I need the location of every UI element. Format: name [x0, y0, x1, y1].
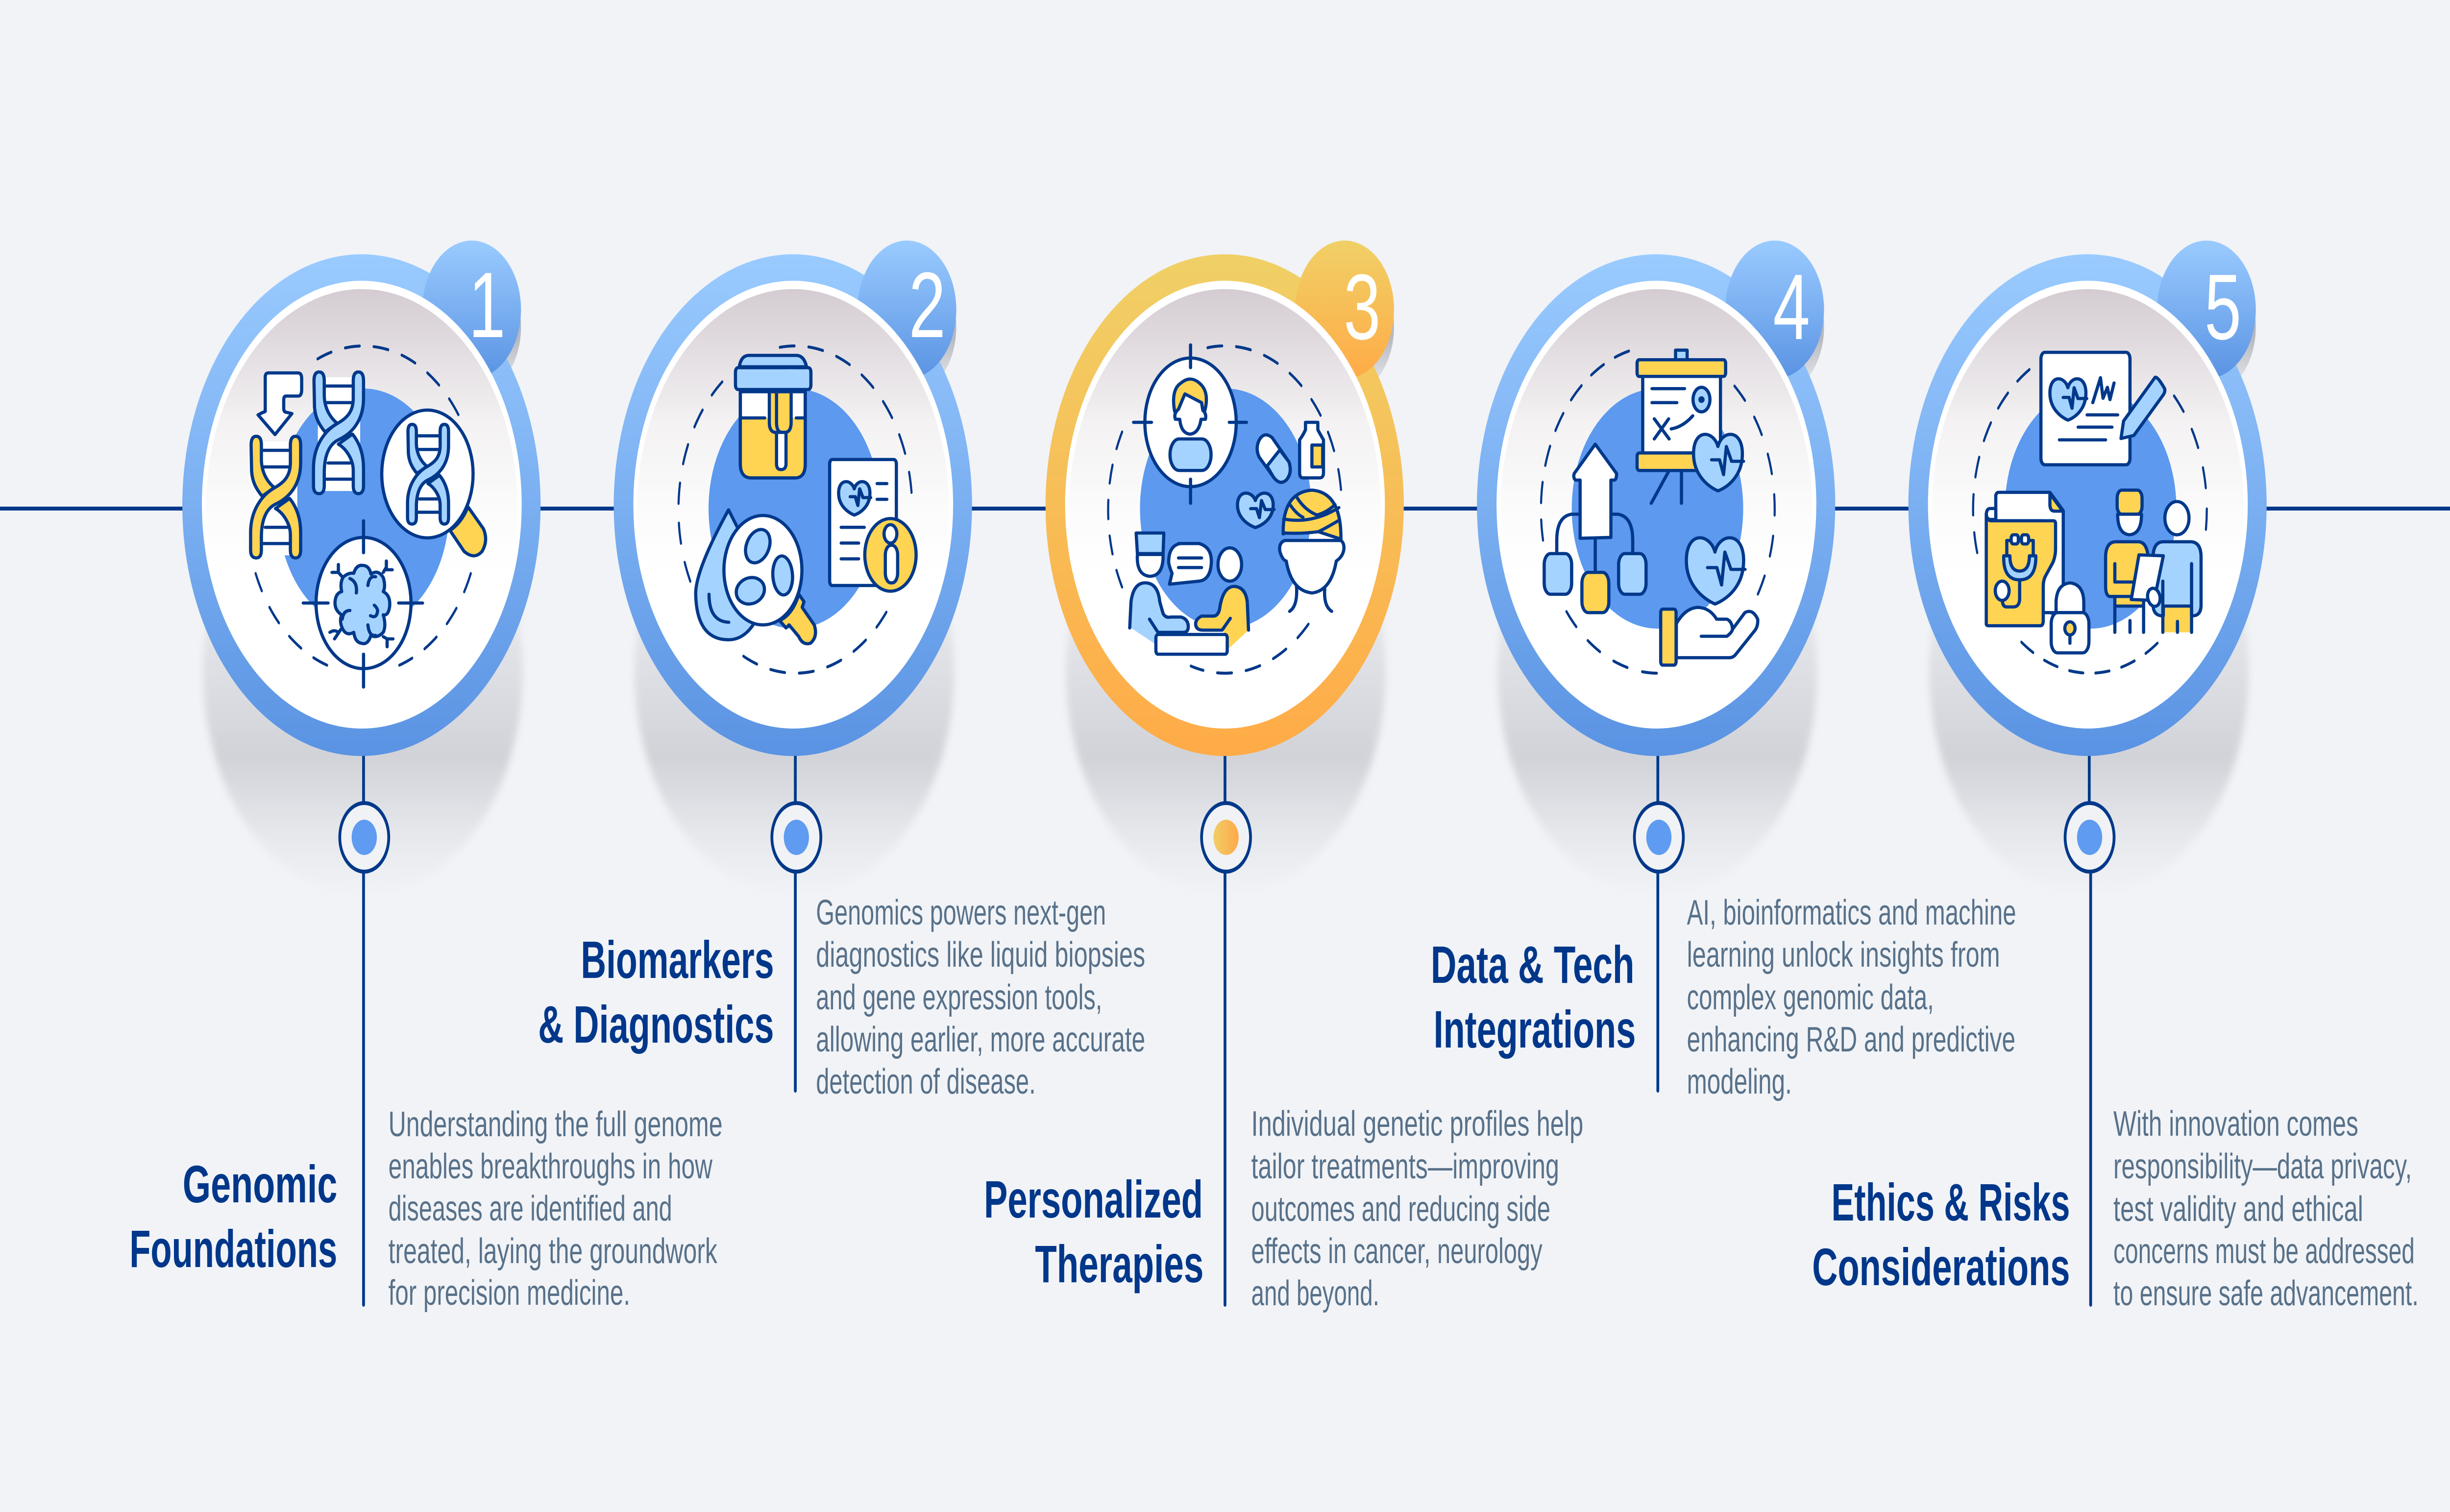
- connector stem: [1656, 755, 1660, 1091]
- drop shadow: [203, 447, 523, 895]
- description text: concerns must be addressed: [2113, 1232, 2415, 1271]
- description text: diagnostics like liquid biopsies: [816, 935, 1145, 975]
- timeline dot: [340, 803, 389, 872]
- drop shadow: [1929, 447, 2249, 895]
- outer ring: [613, 254, 972, 756]
- panel 2: biomarkers and diagnostics: [538, 241, 1145, 1101]
- icon: data board, flowchart and heart care: [1544, 350, 1758, 665]
- description text: complex genomic data,: [1687, 978, 1934, 1017]
- timeline dot: [772, 803, 821, 872]
- panel 1: genomic foundations: [129, 241, 723, 1313]
- description text: diseases are identified and: [389, 1189, 672, 1228]
- centre blue disc: [709, 389, 880, 629]
- outer ring: [1909, 254, 2267, 756]
- description text: treated, laying the groundwork: [389, 1232, 717, 1271]
- description text: tailor treatments—improving: [1251, 1147, 1559, 1186]
- heading: ethics and risks considerations: Considerations: [1812, 1237, 2070, 1296]
- heading: genomic foundations: Foundations: [129, 1219, 337, 1278]
- panel 5: ethics and risks considerations: [1812, 241, 2419, 1313]
- number badge: [1725, 241, 1824, 379]
- inner disc: [633, 281, 953, 729]
- heading: ethics and risks considerations: [1812, 1172, 2070, 1296]
- badge shadow: [422, 258, 521, 396]
- centre blue disc: [1140, 389, 1311, 629]
- description text: [1251, 1104, 1583, 1313]
- description text: With innovation comes: [2113, 1104, 2358, 1144]
- heading: data and tech integrations: [1431, 935, 1636, 1059]
- number badge: 4: [1773, 255, 1810, 359]
- dashed orbit: [679, 346, 912, 673]
- dashed orbit: [1108, 346, 1341, 673]
- outer ring: [1046, 254, 1404, 756]
- description text: outcomes and reducing side: [1251, 1190, 1550, 1229]
- centre blue disc: [278, 389, 449, 629]
- heading: biomarkers and diagnostics: & Diagnostics: [538, 995, 774, 1054]
- description text: Individual genetic profiles help: [1251, 1104, 1583, 1144]
- centre blue disc: [2005, 389, 2177, 629]
- icon: personalised patient care: [1130, 345, 1344, 654]
- number badge: 1: [468, 253, 506, 357]
- icon: sample jar, blood drop and report: [696, 355, 916, 644]
- timeline dot: [2065, 803, 2114, 872]
- description text: detection of disease.: [816, 1062, 1036, 1101]
- number badge: [422, 241, 521, 379]
- inner disc: [1928, 281, 2248, 729]
- description text: [2113, 1104, 2419, 1313]
- dashed orbit: [256, 346, 471, 665]
- badge shadow: [1296, 258, 1394, 396]
- icon: medical records, lock and clinicians: [1986, 352, 2201, 653]
- description text: [816, 893, 1145, 1101]
- description text: effects in cancer, neurology: [1251, 1232, 1543, 1271]
- connector stem: [1223, 755, 1227, 1305]
- inner disc: [1496, 281, 1816, 729]
- heading: data and tech integrations: Data & Tech: [1431, 935, 1634, 994]
- inner disc: [1065, 281, 1385, 729]
- dashed orbit: [1541, 351, 1775, 673]
- heading: personalized therapies: Therapies: [1035, 1234, 1203, 1293]
- heading: genomic foundations: Genomic: [183, 1154, 337, 1214]
- connector stem: [2089, 755, 2091, 1305]
- description text: [1687, 893, 2016, 1101]
- panel 3: personalized therapies: [984, 241, 1583, 1313]
- centre blue disc: [1572, 389, 1743, 629]
- outer ring: [182, 254, 540, 756]
- description text: modeling.: [1687, 1062, 1792, 1101]
- description text: AI, bioinformatics and machine: [1687, 893, 2016, 932]
- number badge: 5: [2205, 255, 2241, 359]
- number badge: 2: [909, 253, 946, 357]
- badge shadow: [1725, 258, 1824, 396]
- description text: for precision medicine.: [389, 1273, 630, 1313]
- description text: enables breakthroughs in how: [389, 1147, 713, 1186]
- heading: biomarkers and diagnostics: [538, 930, 774, 1054]
- number badge: [2157, 241, 2256, 379]
- horizontal timeline: [0, 507, 2450, 511]
- connector stem: [793, 755, 797, 1091]
- description text: enhancing R&D and predictive: [1687, 1020, 2015, 1059]
- description text: learning unlock insights from: [1687, 935, 2000, 975]
- drop shadow: [1066, 447, 1386, 895]
- heading: personalized therapies: Personalized: [984, 1170, 1203, 1229]
- badge shadow: [2157, 258, 2256, 396]
- connector stem: [362, 755, 366, 1305]
- drop shadow: [635, 447, 954, 895]
- dashed orbit: [1973, 368, 2207, 673]
- heading: genomic foundations: [129, 1154, 337, 1278]
- description text: test validity and ethical: [2113, 1190, 2363, 1229]
- description text: to ensure safe advancement.: [2113, 1274, 2419, 1313]
- heading: data and tech integrations: Integrations: [1434, 1000, 1636, 1059]
- timeline dot: [1201, 803, 1250, 872]
- heading: ethics and risks considerations: Ethics & Risks: [1832, 1172, 2070, 1232]
- number badge: [858, 241, 956, 379]
- icon: dna and tumour analysis: [250, 372, 486, 687]
- heading: personalized therapies: [984, 1170, 1203, 1293]
- drop shadow: [1497, 447, 1817, 895]
- heading: biomarkers and diagnostics: Biomarkers: [581, 930, 774, 989]
- description text: and gene expression tools,: [816, 978, 1102, 1017]
- description text: Genomics powers next-gen: [816, 893, 1106, 932]
- description text: responsibility—data privacy,: [2113, 1147, 2412, 1186]
- number badge: 3: [1344, 255, 1381, 359]
- panel 4: data and tech integrations: [1431, 241, 2016, 1101]
- number badge: [1296, 241, 1394, 379]
- inner disc: [202, 281, 522, 729]
- timeline dot: [1634, 803, 1683, 872]
- description text: Understanding the full genome: [389, 1105, 723, 1144]
- outer ring: [1477, 254, 1835, 756]
- badge shadow: [858, 258, 956, 396]
- description text: allowing earlier, more accurate: [816, 1020, 1145, 1059]
- description text: [389, 1105, 723, 1313]
- description text: and beyond.: [1251, 1274, 1379, 1313]
